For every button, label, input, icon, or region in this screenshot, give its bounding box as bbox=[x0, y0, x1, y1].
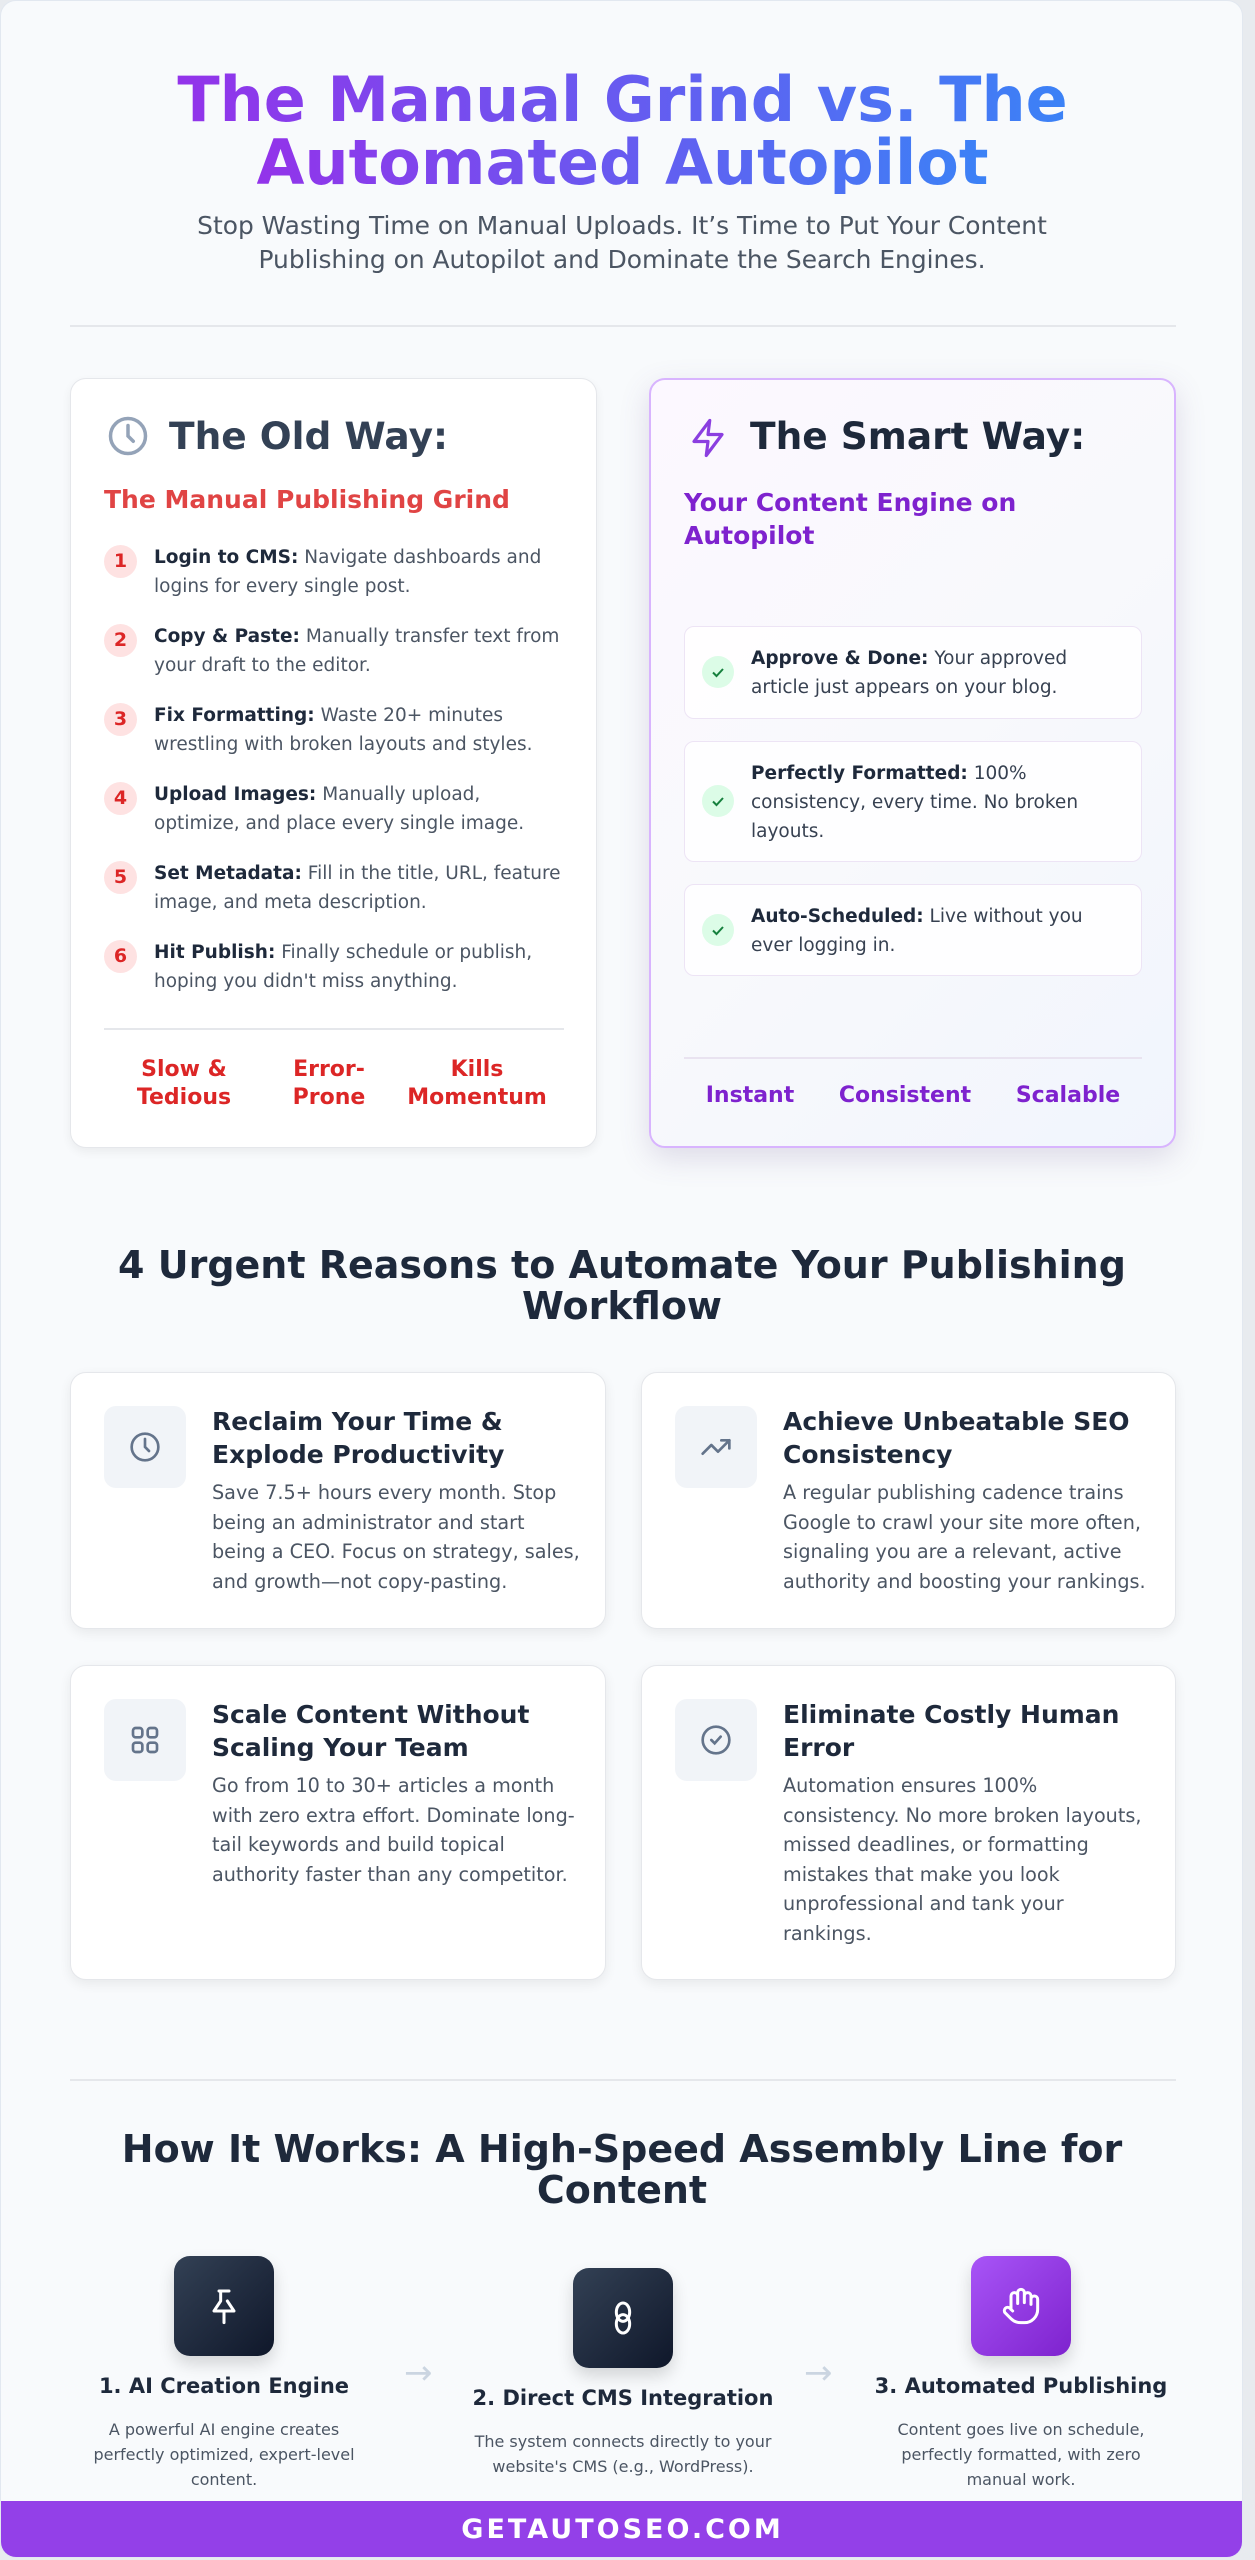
tags: old way drawbacks: Tedious bbox=[137, 1085, 231, 1110]
subheading: autopilot: Your Content Engine on Autopilot bbox=[684, 488, 1016, 550]
card: scale content: authority faster than any competitor. bbox=[212, 1862, 568, 1886]
list: manual steps bbox=[104, 545, 561, 992]
feature: scheduled bbox=[684, 884, 1142, 976]
footer bbox=[1, 2501, 1244, 2559]
subtitle: Stop Wasting Time on Manual Uploads. It’s Time to Put Your Content Publishing on Autopilot and Dominate the Search Engines. bbox=[197, 211, 1047, 274]
list: manual steps: 2 bbox=[114, 629, 127, 651]
step 2: The system connects directly to your website's CMS (e.g., WordPress). bbox=[475, 2432, 771, 2476]
list: manual steps: Login to CMS: Navigate dashboards and logins for every single post. bbox=[154, 547, 541, 597]
list: manual steps: 1 bbox=[114, 550, 127, 572]
heading: old way: The Old Way: bbox=[169, 414, 448, 458]
tags: smart way benefits: Instant bbox=[706, 1083, 794, 1108]
tags: old way drawbacks: Momentum bbox=[407, 1085, 547, 1110]
step 3: Content goes live on schedule, perfectly formatted, with zero manual work. bbox=[897, 2420, 1145, 2489]
feature: scheduled: Auto-Scheduled: Live without you ever logging in. bbox=[751, 906, 1083, 956]
card: seo consistency: Google to crawl your site more often, bbox=[783, 1510, 1141, 1534]
card: reclaim time: Save 7.5+ hours every month. Stop bbox=[212, 1481, 556, 1504]
card: scale content: Go from 10 to 30+ articles a month bbox=[212, 1774, 554, 1797]
card: human error: missed deadlines, or formatting bbox=[783, 1833, 1089, 1856]
icon: clock bbox=[108, 416, 148, 456]
tags: smart way benefits: Scalable bbox=[1016, 1083, 1120, 1108]
card: seo consistency bbox=[641, 1372, 1176, 1629]
tags: old way drawbacks bbox=[137, 1057, 547, 1110]
feature: approve bbox=[684, 626, 1142, 719]
list: manual steps: 6 bbox=[114, 945, 127, 967]
step 1 bbox=[93, 2256, 355, 2489]
card: reclaim time: Reclaim Your Time & Explode Productivity bbox=[212, 1407, 504, 1469]
icon: clock bbox=[104, 1406, 186, 1488]
card: human error bbox=[641, 1665, 1176, 1980]
card: reclaim time: and growth—not copy-pasting. bbox=[212, 1570, 507, 1592]
step 3: 3. Automated Publishing bbox=[875, 2374, 1167, 2398]
tags: smart way benefits bbox=[706, 1083, 1120, 1108]
footer: GETAUTOSEO.COM bbox=[461, 2514, 784, 2545]
feature: formatted: Perfectly Formatted: 100% consistency, every time. No broken layouts. bbox=[751, 763, 1078, 842]
step 2 bbox=[473, 2268, 773, 2476]
icon: grid bbox=[104, 1699, 186, 1781]
card: reclaim time: being an administrator and start bbox=[212, 1510, 525, 1534]
arrow: → bbox=[804, 2353, 832, 2393]
feature: approve: Approve & Done: Your approved article just appears on your blog. bbox=[751, 648, 1067, 698]
panel: old way bbox=[70, 378, 597, 1148]
title: Automated Autopilot bbox=[257, 126, 988, 199]
heading: smart way: The Smart Way: bbox=[750, 414, 1085, 458]
icon: hand bbox=[971, 2256, 1071, 2356]
card: human error: unprofessional and tank your bbox=[783, 1892, 1064, 1915]
step 2: 2. Direct CMS Integration bbox=[473, 2386, 773, 2410]
heading: how it works: How It Works: A High-Speed Assembly Line for Content bbox=[122, 2127, 1122, 2212]
list: manual steps: 3 bbox=[114, 708, 127, 730]
feature: formatted bbox=[684, 741, 1142, 862]
tags: old way drawbacks: Slow & bbox=[141, 1057, 227, 1082]
tags: old way drawbacks: Prone bbox=[293, 1085, 365, 1110]
title bbox=[177, 63, 1068, 199]
card: seo consistency: Achieve Unbeatable SEO Consistency bbox=[783, 1407, 1130, 1469]
card: human error: rankings. bbox=[783, 1922, 872, 1944]
tags: old way drawbacks: Kills bbox=[451, 1057, 503, 1082]
arrow: → bbox=[404, 2353, 432, 2393]
icon: check circle bbox=[675, 1699, 757, 1781]
list: manual steps: 5 bbox=[114, 866, 127, 888]
card: scale content: tail keywords and build topical bbox=[212, 1833, 505, 1856]
step 1: A powerful AI engine creates perfectly optimized, expert-level content. bbox=[93, 2420, 355, 2489]
heading: 4 reasons: 4 Urgent Reasons to Automate Your Publishing Workflow bbox=[118, 1243, 1126, 1328]
card: scale content bbox=[70, 1665, 606, 1980]
icon: bolt bbox=[692, 418, 724, 458]
panel: smart way bbox=[649, 378, 1176, 1148]
title: The Manual Grind vs. The bbox=[177, 63, 1068, 136]
step 1: 1. AI Creation Engine bbox=[99, 2374, 349, 2398]
list: manual steps: Fix Formatting: Waste 20+ minutes wrestling with broken layouts and styles. bbox=[154, 705, 532, 755]
subheading: manual grind: The Manual Publishing Grind bbox=[104, 485, 510, 514]
card: human error: mistakes that make you look bbox=[783, 1862, 1060, 1886]
step 3 bbox=[875, 2256, 1167, 2489]
icon: trend bbox=[675, 1406, 757, 1488]
icon: pin bbox=[174, 2256, 274, 2356]
list: manual steps: 4 bbox=[114, 787, 127, 809]
list: manual steps: Hit Publish: Finally schedule or publish, hoping you didn't miss anything. bbox=[154, 942, 532, 992]
list: manual steps: Set Metadata: Fill in the title, URL, feature image, and meta description. bbox=[154, 863, 561, 913]
card: reclaim time bbox=[70, 1372, 606, 1629]
card: seo consistency: authority and boosting your rankings. bbox=[783, 1570, 1146, 1592]
card: scale content: Scale Content Without Scaling Your Team bbox=[212, 1700, 529, 1762]
card: reclaim time: being a CEO. Focus on strategy, sales, bbox=[212, 1540, 580, 1563]
card: human error: Eliminate Costly Human Error bbox=[783, 1700, 1119, 1762]
tags: smart way benefits: Consistent bbox=[839, 1083, 971, 1108]
list: manual steps: Upload Images: Manually upload, optimize, and place every single image. bbox=[154, 784, 524, 834]
list: manual steps: Copy & Paste: Manually transfer text from your draft to the editor. bbox=[154, 626, 559, 676]
card: scale content: with zero extra effort. Dominate long- bbox=[212, 1804, 575, 1826]
card: seo consistency: signaling you are a relevant, active bbox=[783, 1540, 1122, 1563]
card: human error: Automation ensures 100% bbox=[783, 1774, 1037, 1797]
tags: old way drawbacks: Error- bbox=[293, 1057, 365, 1082]
card: human error: consistency. No more broken layouts, bbox=[783, 1804, 1141, 1826]
icon: link bbox=[573, 2268, 673, 2368]
card: seo consistency: A regular publishing cadence trains bbox=[783, 1481, 1124, 1504]
